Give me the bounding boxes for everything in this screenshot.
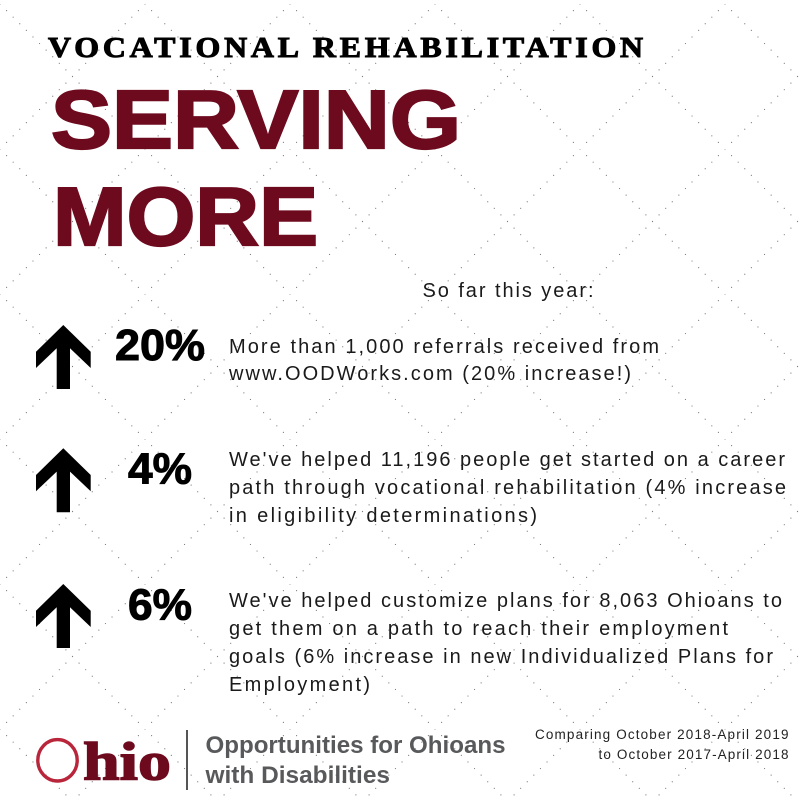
heading: serving more: SERVING	[51, 73, 461, 166]
text: comparison dates: to October 2017-April 2018	[598, 747, 788, 762]
text: eligibility: in eligibility determinations)	[229, 505, 537, 527]
stat: 4%: 4%	[128, 444, 192, 494]
panel: 20% stat	[36, 321, 659, 389]
text: plans: We've helped customize plans for 8,063 Ohioans to	[229, 590, 782, 612]
heading: serving more: MORE	[53, 170, 318, 263]
text: referrals: www.OODWorks.com (20% increase!)	[228, 363, 631, 385]
text: so far this year: So far this year:	[422, 280, 594, 302]
panel: 4% stat	[36, 444, 786, 527]
wordmark: hio: hio	[83, 732, 171, 792]
text: referrals	[228, 336, 659, 385]
title: vocational rehabilitation: VOCATIONAL REHABILITATION	[48, 31, 643, 64]
icon: up arrow	[36, 448, 91, 512]
text: plans	[229, 590, 782, 696]
stat: 6%: 6%	[128, 580, 192, 630]
text: organization name	[204, 732, 505, 789]
text: referrals: More than 1,000 referrals received from	[229, 336, 659, 358]
divider line	[186, 730, 188, 790]
icon: up arrow	[36, 325, 91, 389]
text: organization name: with Disabilities	[204, 762, 390, 789]
text: organization name: Opportunities for Ohioans	[206, 732, 506, 759]
stat: 20%: 20%	[115, 321, 205, 370]
text: plans: Employment)	[229, 674, 370, 696]
heading: serving more	[51, 73, 461, 263]
text: eligibility	[229, 449, 786, 527]
text: plans: goals (6% increase in new Individualized Plans for	[229, 646, 773, 668]
icon: up arrow	[36, 584, 91, 648]
logo: Ohio	[38, 732, 171, 792]
text: comparison dates: Comparing October 2018-April 2019	[535, 727, 788, 742]
text: eligibility: We've helped 11,196 people get started on a career	[229, 449, 785, 471]
text: eligibility: path through vocational rehabilitation (4% increase	[229, 477, 786, 499]
text: comparison dates	[535, 727, 788, 762]
text: plans: get them on a path to reach their employment	[229, 618, 728, 640]
icon: red O ring	[38, 740, 77, 781]
panel: 6% stat	[36, 580, 782, 696]
